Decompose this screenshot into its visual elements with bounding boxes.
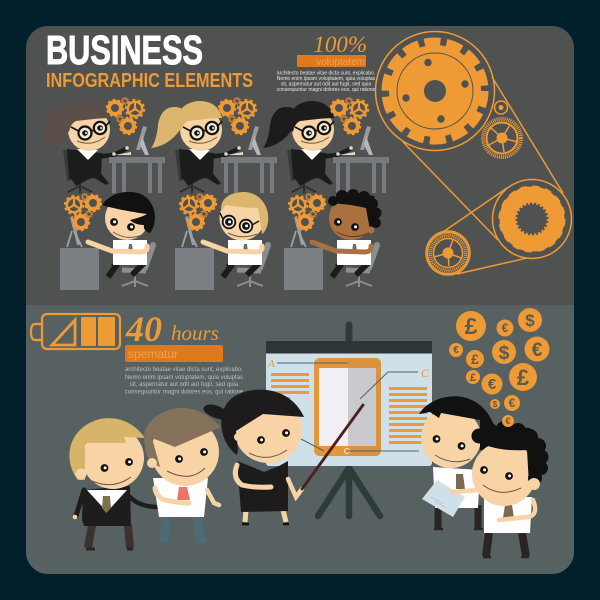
person: man with document	[419, 396, 495, 529]
description: consequuntur magni dolores eos, qui ratione	[125, 390, 244, 396]
money coins: €	[502, 321, 509, 335]
money coins: €	[488, 376, 497, 393]
money coins	[449, 308, 550, 427]
worker: black-haired man at desk	[60, 192, 155, 290]
lower pulley	[428, 232, 468, 274]
icon: battery	[31, 314, 120, 349]
money coins: €	[509, 396, 516, 410]
panel: bottom section	[26, 305, 574, 574]
leader lines	[277, 363, 419, 451]
money coins: £	[465, 313, 478, 339]
worker: blonde woman at desk	[151, 98, 277, 193]
money coins: €	[532, 340, 543, 361]
person: woman presenter with pointer	[203, 390, 304, 524]
presentation board	[266, 325, 432, 516]
description: sit, aspernatur aut odit aut fugit, sed quia	[130, 382, 239, 388]
label bar: voluptatem	[316, 57, 365, 68]
worker: black-haired woman at desk	[263, 98, 389, 193]
panel: top section	[26, 26, 574, 305]
money coins: €	[505, 416, 511, 426]
stat: 40 hours: hours	[171, 321, 219, 345]
label A: A	[267, 358, 275, 370]
description: consequuntur magni dolores eos, qui ratione	[277, 87, 376, 93]
money coins: £	[470, 372, 476, 384]
gear belt diagram	[376, 32, 572, 275]
callout: 40 hours spematur	[125, 309, 244, 396]
money coins: £	[517, 365, 530, 390]
person: businessman in suit	[69, 418, 164, 549]
toothed wheel	[483, 119, 521, 157]
pointer stick	[302, 405, 363, 489]
large gear	[386, 42, 484, 140]
worker: dark-skinned man at desk	[284, 189, 382, 290]
tablet	[314, 358, 381, 456]
person: man in white shirt	[144, 408, 221, 541]
worker: blond man with glasses at desk	[175, 192, 268, 290]
person: curly-haired man	[472, 421, 548, 557]
money coins: $	[525, 311, 535, 330]
money coins: £	[471, 351, 479, 367]
board surface	[266, 341, 432, 466]
title: BUSINESS	[46, 27, 203, 73]
label C: C	[421, 366, 430, 380]
description: sit, aspernatur aut odit aut fugit, sed quia	[281, 82, 371, 88]
right text bars	[389, 387, 427, 444]
description: Nemo enim ipsam voluptatem, quia voluptas	[125, 375, 243, 381]
stat: 100%: 100%	[313, 32, 367, 57]
description: architecto beatae vitae dicta sunt, explicabo.	[125, 367, 243, 373]
easel	[318, 325, 380, 516]
belts	[376, 32, 572, 275]
medium gear	[501, 188, 563, 250]
small pulley	[494, 101, 508, 114]
label bar: spematur	[128, 347, 178, 361]
stat: 40 hours: 40	[125, 309, 162, 349]
subtitle: INFOGRAPHIC ELEMENTS	[46, 70, 253, 92]
left text bars	[271, 373, 309, 400]
callout: 100% voluptatem	[277, 32, 376, 93]
money coins: $	[493, 400, 498, 409]
money coins: €	[453, 345, 459, 356]
board header	[266, 341, 432, 354]
description: architecto beatae vitae dicta sunt, explicabo.	[277, 70, 375, 76]
worker: brown-haired woman at desk	[39, 98, 165, 193]
document	[422, 480, 465, 517]
money coins: $	[499, 343, 510, 364]
description: Nemo enim ipsam voluptatem, quia voluptas	[277, 76, 376, 82]
